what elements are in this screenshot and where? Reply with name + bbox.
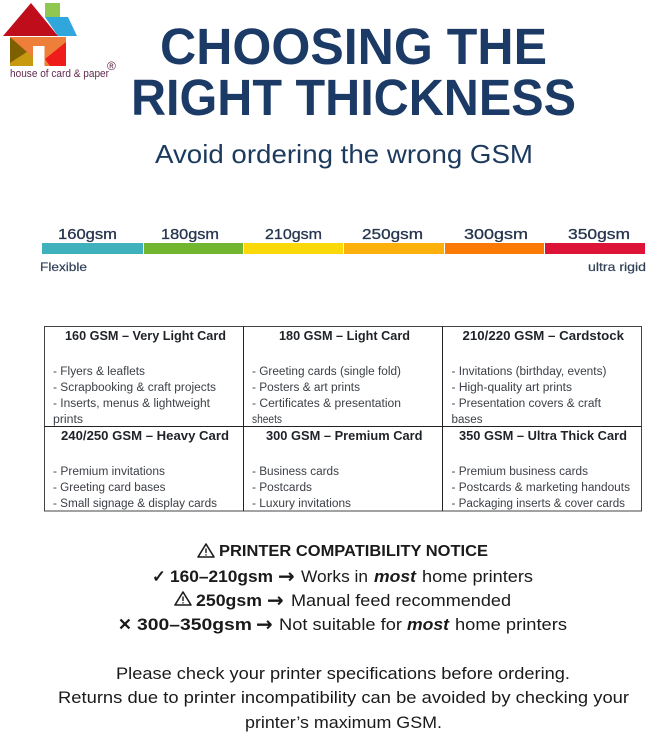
- table of card weights: [44, 326, 642, 511]
- line: works in most home printers: most: [374, 568, 418, 586]
- line: works in most home printers: home printers: [422, 568, 533, 586]
- footer note: Please check your printer specifications before ordering.: [116, 665, 570, 683]
- cell: 160 GSM: - Inserts, menus & lightweight: [53, 398, 211, 410]
- footer note: printer’s maximum GSM.: [245, 714, 442, 732]
- printer compatibility notice: [118, 543, 567, 636]
- cell: 180 GSM: 180 GSM – Light Card: [279, 329, 410, 343]
- line: works in most home printers: [152, 564, 533, 588]
- cell: 160 GSM: [53, 329, 226, 426]
- line: manual feed recommended: Manual feed recommended: [291, 592, 511, 610]
- logo: house of card and paper: house of card & paper: [10, 68, 109, 80]
- cell: 300 GSM: - Luxury invitations: [252, 498, 351, 510]
- line: works in most home printers: →: [278, 564, 295, 588]
- cell: 210/220 GSM: [452, 329, 624, 426]
- scale labels: 210gsm: [265, 226, 322, 243]
- cell: 240/250 GSM: - Greeting card bases: [53, 482, 166, 494]
- scale labels: 160gsm: [58, 226, 117, 243]
- line: works in most home printers: ✓: [152, 568, 166, 586]
- scale labels: 350gsm: [568, 226, 630, 243]
- line: not suitable for most home printers: ✕: [118, 616, 132, 634]
- logo: house of card and paper: [3, 3, 116, 80]
- cell: 350 GSM: - Packaging inserts & cover cards: [452, 498, 625, 510]
- line: not suitable for most home printers: Not suitable for: [279, 616, 403, 634]
- title: CHOOSING THE: [160, 18, 547, 75]
- title: RIGHT THICKNESS: [131, 69, 576, 126]
- line: manual feed recommended: →: [267, 588, 284, 612]
- cell: 350 GSM: [452, 429, 630, 510]
- subtitle: Avoid ordering the wrong GSM: [155, 139, 533, 169]
- cell: 160 GSM: - Flyers & leaflets: [53, 366, 145, 378]
- line: works in most home printers: 160–210gsm: [170, 568, 273, 586]
- thickness scale: [40, 226, 646, 274]
- footer note: [58, 665, 630, 732]
- cell: 180 GSM: - Greeting cards (single fold): [252, 366, 401, 378]
- cell: 210/220 GSM: - High-quality art prints: [452, 382, 572, 394]
- line: not suitable for most home printers: 300–350gsm: [137, 616, 252, 634]
- cell: 210/220 GSM: - Presentation covers & craft: [452, 398, 602, 410]
- line: not suitable for most home printers: most: [407, 616, 451, 634]
- line: manual feed recommended: 250gsm: [196, 592, 262, 610]
- line: manual feed recommended: [196, 588, 511, 612]
- scale end labels: ultra rigid: [588, 260, 646, 274]
- line: works in most home printers: Works in: [301, 568, 368, 586]
- scale labels: [58, 226, 630, 243]
- cell: 240/250 GSM: - Small signage & display cards: [53, 498, 217, 510]
- cell: 300 GSM: 300 GSM – Premium Card: [266, 429, 422, 443]
- cell: 240/250 GSM: 240/250 GSM – Heavy Card: [61, 429, 229, 443]
- cell: 160 GSM: 160 GSM – Very Light Card: [65, 329, 226, 343]
- cell: 300 GSM: - Business cards: [252, 466, 339, 478]
- cell: 180 GSM: [252, 329, 410, 426]
- cell: 160 GSM: prints: [53, 414, 83, 426]
- scale end labels: Flexible: [40, 260, 87, 274]
- cell: 180 GSM: sheets: [252, 414, 282, 426]
- cell: 210/220 GSM: - Invitations (birthday, events): [452, 366, 607, 378]
- scale labels: 180gsm: [161, 226, 219, 243]
- cell: 180 GSM: - Posters & art prints: [252, 382, 360, 394]
- cell: 240/250 GSM: - Premium invitations: [53, 466, 165, 478]
- logo: house of card and paper: ®: [107, 59, 116, 73]
- title: [131, 18, 576, 126]
- line: not suitable for most home printers: home printers: [455, 616, 567, 634]
- scale labels: 250gsm: [362, 226, 423, 243]
- notice heading: PRINTER COMPATIBILITY NOTICE: [219, 543, 488, 560]
- footer note: Returns due to printer incompatibility can be avoided by checking your: [58, 689, 630, 707]
- scale labels: 300gsm: [464, 226, 528, 243]
- icon: warning: [198, 544, 214, 557]
- cell: 240/250 GSM: [53, 429, 229, 510]
- line: not suitable for most home printers: →: [256, 612, 273, 636]
- cell: 350 GSM: 350 GSM – Ultra Thick Card: [459, 429, 627, 443]
- cell: 160 GSM: - Scrapbooking & craft projects: [53, 382, 216, 394]
- icon: warning: [175, 592, 191, 605]
- cell: 300 GSM: [252, 429, 422, 510]
- cell: 350 GSM: - Premium business cards: [452, 466, 588, 478]
- cell: 210/220 GSM: bases: [452, 414, 483, 426]
- cell: 180 GSM: - Certificates & presentation: [252, 398, 401, 410]
- scale bar: [42, 243, 645, 254]
- line: not suitable for most home printers: [118, 612, 567, 636]
- cell: 210/220 GSM: 210/220 GSM – Cardstock: [462, 329, 624, 343]
- cell: 300 GSM: - Postcards: [252, 482, 312, 494]
- scale end labels: [40, 260, 646, 274]
- cell: 350 GSM: - Postcards & marketing handouts: [452, 482, 630, 494]
